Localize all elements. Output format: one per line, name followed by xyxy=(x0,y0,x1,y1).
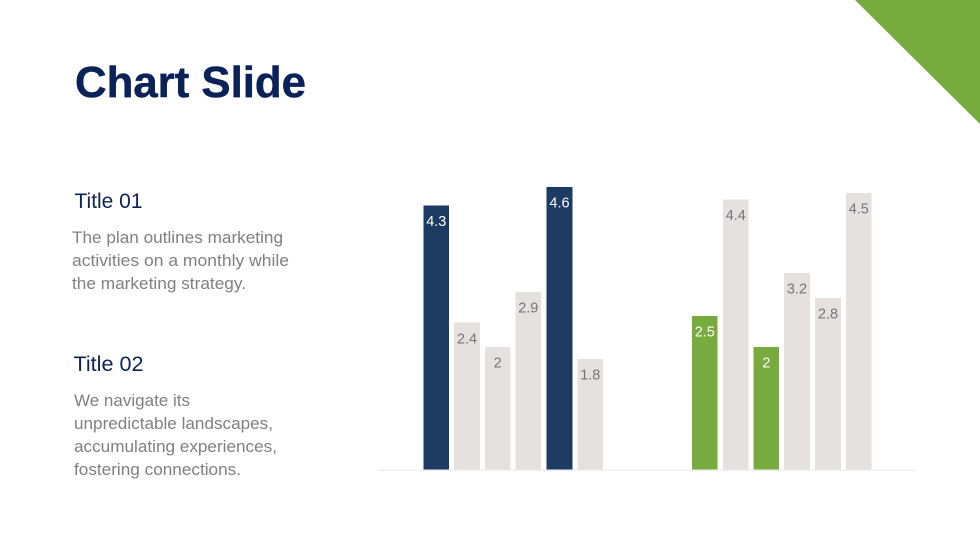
body: title 02: accumulating experiences, xyxy=(74,437,277,456)
bar 3.2 xyxy=(784,273,810,470)
bar 2 xyxy=(485,347,510,470)
bar 2.4: 2.4 xyxy=(457,332,477,348)
body: title 02 xyxy=(74,391,277,479)
body: title 02: fostering connections. xyxy=(74,460,241,479)
body: title 01: the marketing strategy. xyxy=(72,274,246,293)
baseline xyxy=(378,470,916,471)
body: title 02: We navigate its xyxy=(74,391,190,410)
bar chart xyxy=(378,187,916,471)
bar group 2 xyxy=(692,193,872,470)
body: title 01 xyxy=(72,228,289,293)
bar 2 xyxy=(754,347,779,470)
bar 2.5: 2.5 xyxy=(695,324,715,340)
bar 4.3: 4.3 xyxy=(426,214,446,230)
bar 4.6 xyxy=(546,187,572,470)
bar 1.8: 1.8 xyxy=(580,368,600,384)
heading: title 01: Title 01 xyxy=(74,190,142,213)
bar group 1 xyxy=(424,187,603,470)
bar 2: 2 xyxy=(762,356,770,372)
bar 1.8 xyxy=(578,359,603,470)
bar 4.5 xyxy=(846,193,872,470)
body: title 02: unpredictable landscapes, xyxy=(74,414,273,433)
text block: title 02 xyxy=(74,353,277,479)
bar 2.9: 2.9 xyxy=(518,300,538,316)
heading: title 02: Title 02 xyxy=(74,353,144,376)
bar 2: 2 xyxy=(494,356,502,372)
bar 4.3 xyxy=(424,206,449,470)
bar 2.8: 2.8 xyxy=(818,306,838,322)
bar 2.8 xyxy=(815,298,841,470)
bar 2.9 xyxy=(516,292,541,470)
bar 2.5 xyxy=(692,316,718,470)
body: title 01: activities on a monthly while xyxy=(72,251,289,270)
bar 4.4 xyxy=(723,200,748,470)
bar 3.2: 3.2 xyxy=(787,282,807,298)
bar 2.4 xyxy=(454,322,480,470)
bar 4.5: 4.5 xyxy=(849,202,869,218)
body: title 01: The plan outlines marketing xyxy=(72,228,283,247)
text block: title 01 xyxy=(72,190,289,293)
title: Chart Slide xyxy=(75,58,306,107)
corner triangle xyxy=(855,0,980,124)
bar 4.4: 4.4 xyxy=(726,208,746,224)
bar 4.6: 4.6 xyxy=(549,196,570,212)
